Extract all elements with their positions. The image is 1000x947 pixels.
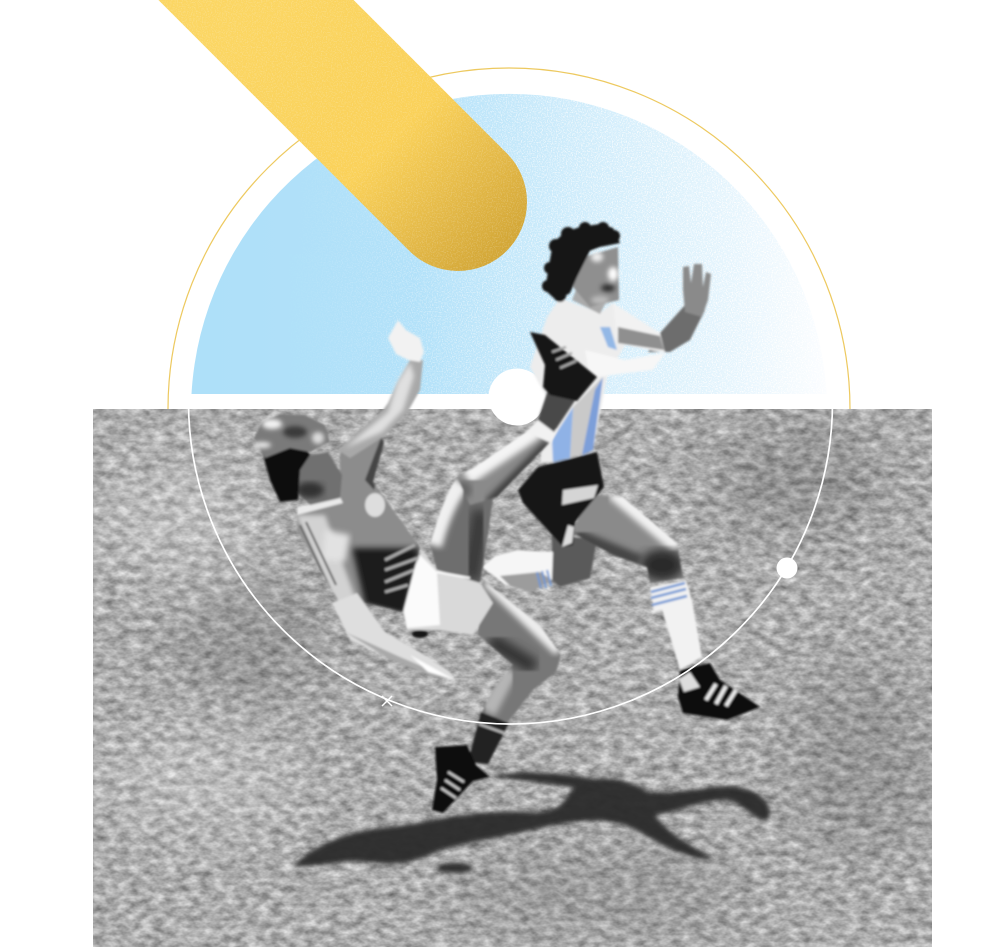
supporting leg [478, 580, 561, 722]
shorts stripe [562, 485, 598, 505]
raised fist [388, 320, 424, 362]
dark sock upper [538, 390, 578, 432]
white node on ring right [776, 558, 798, 578]
players shadow [293, 773, 770, 873]
blue semicircle [192, 94, 806, 394]
cross marker on ring [382, 696, 392, 706]
jersey body [530, 298, 625, 463]
upper arm sleeve [613, 303, 665, 353]
hair highlights [253, 419, 324, 448]
front sock [650, 580, 702, 670]
face [573, 247, 619, 307]
boot stripes [706, 684, 736, 706]
dark sock [468, 712, 509, 764]
supporting boot [432, 745, 490, 813]
player in striped jersey [482, 222, 760, 720]
sock stripe [479, 724, 504, 733]
front boot [678, 663, 760, 720]
raised forearm [648, 305, 705, 352]
back sock stripes [537, 570, 551, 588]
white shorts [400, 550, 493, 635]
back leg knee [552, 535, 597, 587]
blue stripe chest [600, 327, 617, 350]
shorts drop [412, 630, 428, 638]
yellow diagonal pill [150, 0, 540, 280]
shin [454, 427, 552, 505]
face [295, 452, 342, 505]
thin yellow arc [168, 68, 850, 409]
shorts edge [562, 525, 574, 547]
face shade [296, 482, 324, 498]
jersey lower panel [570, 377, 603, 458]
dark hair [262, 440, 310, 502]
curly hair [542, 222, 620, 302]
boot heel [679, 672, 700, 692]
lower arm [332, 593, 455, 680]
back sock shade [500, 572, 552, 592]
blue stripe left [552, 407, 573, 462]
back sock [482, 550, 553, 592]
player in bicycle kick [253, 320, 597, 813]
white node on ring top [488, 368, 546, 426]
arm shade [618, 327, 664, 350]
collar [297, 497, 343, 515]
face highlights [591, 252, 618, 304]
thigh [430, 477, 493, 583]
shorts [518, 452, 604, 547]
kicking boot [530, 332, 597, 401]
grass field photo [90, 409, 932, 947]
supporting boot stripes [441, 772, 464, 798]
white ring [188, 402, 832, 724]
kicking boot stripes [552, 347, 576, 368]
upper hair [254, 414, 330, 458]
jersey [296, 433, 420, 615]
open hand [683, 264, 711, 317]
raised arm [338, 360, 423, 458]
shorts highlight [402, 555, 440, 628]
neck [572, 285, 612, 314]
blue stripe right [582, 377, 603, 455]
front sock stripes [651, 583, 687, 605]
front thigh [573, 490, 684, 583]
sock band [526, 420, 557, 443]
lower sleeve [585, 350, 665, 378]
shorts rim [437, 572, 470, 578]
